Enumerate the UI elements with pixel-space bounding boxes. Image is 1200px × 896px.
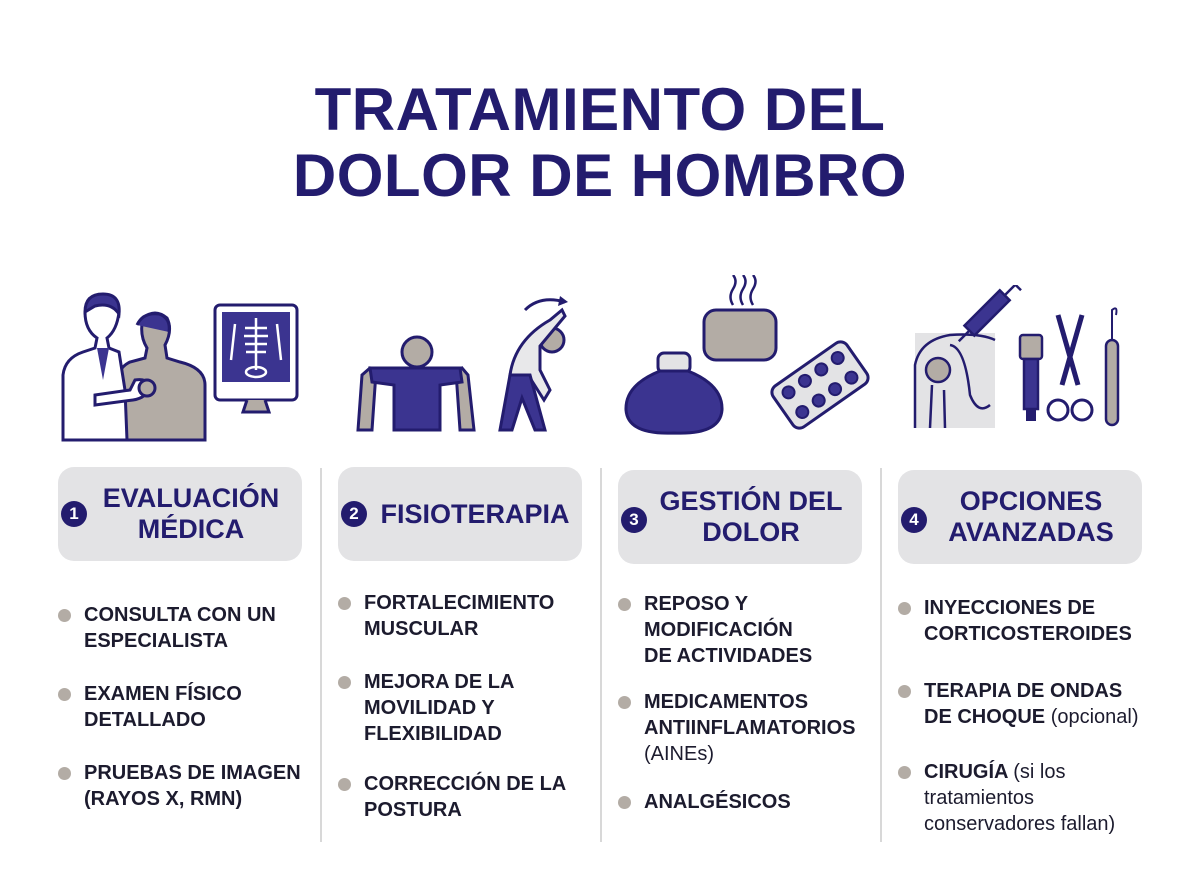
header: gestion: 3: [629, 510, 639, 529]
list: evaluacion: EXAMEN FÍSICO: [84, 683, 242, 705]
list: opciones: TERAPIA DE ONDAS: [924, 680, 1122, 702]
header: evaluacion: MÉDICA: [138, 514, 244, 544]
header: fisioterapia: FISIOTERAPIA: [380, 498, 570, 528]
list: gestion: DE ACTIVIDADES: [644, 645, 812, 667]
header: evaluacion: 1: [69, 504, 79, 523]
list: opciones: CORTICOSTEROIDES: [924, 623, 1132, 645]
header: opciones: AVANZADAS: [948, 517, 1114, 547]
header: opciones: 4: [909, 510, 919, 529]
list: evaluacion: (RAYOS X, RMN): [84, 788, 242, 810]
list: fisioterapia: MOVILIDAD Y: [364, 697, 495, 719]
list: evaluacion: [58, 604, 301, 810]
list: evaluacion: PRUEBAS DE IMAGEN: [84, 762, 301, 784]
list: evaluacion: CONSULTA CON UN: [84, 604, 276, 626]
list: gestion: ANTIINFLAMATORIOS: [644, 717, 855, 739]
list: opciones: [898, 597, 1139, 835]
list: fisioterapia: FORTALECIMIENTO: [364, 592, 554, 614]
list: fisioterapia: MUSCULAR: [364, 618, 478, 640]
header: gestion: [618, 470, 862, 564]
header: fisioterapia: [338, 467, 582, 561]
list: gestion: MODIFICACIÓN: [644, 619, 793, 641]
header: evaluacion: [58, 467, 302, 561]
icon: pain management: [624, 275, 870, 435]
list: fisioterapia: POSTURA: [364, 799, 462, 821]
icon: doctor and x-ray: [62, 292, 298, 442]
header: opciones: OPCIONES: [960, 486, 1102, 516]
list: opciones: INYECCIONES DE: [924, 597, 1095, 619]
icon: physiotherapy: [356, 296, 568, 432]
title: TRATAMIENTO DEL: [315, 76, 885, 143]
list: evaluacion: DETALLADO: [84, 709, 206, 731]
list: gestion: (AINEs): [644, 743, 714, 765]
list: gestion: ANALGÉSICOS: [644, 791, 791, 813]
header: gestion: DOLOR: [702, 517, 800, 547]
header: opciones: [898, 470, 1142, 564]
title: [293, 76, 907, 209]
header: evaluacion: EVALUACIÓN: [103, 483, 279, 513]
title: DOLOR DE HOMBRO: [293, 142, 907, 209]
list: opciones: tratamientos: [924, 787, 1034, 809]
list: opciones: CIRUGÍA (si los: [924, 761, 1066, 783]
list: fisioterapia: MEJORA DE LA: [364, 671, 514, 693]
icon: advanced options: [914, 285, 1120, 428]
list: gestion: MEDICAMENTOS: [644, 691, 808, 713]
list: fisioterapia: FLEXIBILIDAD: [364, 723, 502, 745]
list: opciones: conservadores fallan): [924, 813, 1115, 835]
list: gestion: REPOSO Y: [644, 593, 748, 615]
list: gestion: [618, 593, 855, 813]
header: fisioterapia: 2: [349, 504, 359, 523]
list: fisioterapia: CORRECCIÓN DE LA: [364, 773, 566, 795]
list: fisioterapia: [338, 592, 566, 821]
list: opciones: DE CHOQUE (opcional): [924, 706, 1139, 728]
header: gestion: GESTIÓN DEL: [659, 486, 842, 516]
list: evaluacion: ESPECIALISTA: [84, 630, 228, 652]
